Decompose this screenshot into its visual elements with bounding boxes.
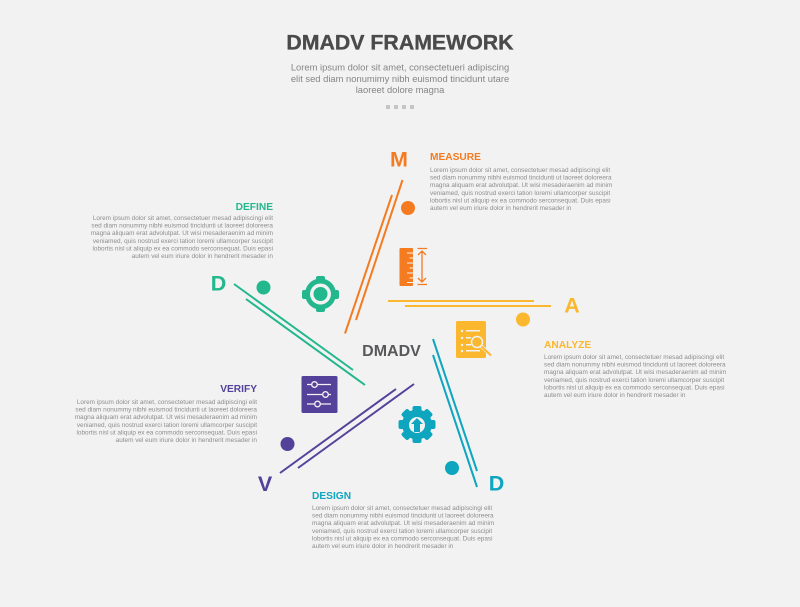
dot measure	[401, 201, 415, 215]
M segment lines	[345, 180, 402, 334]
design body	[312, 505, 494, 550]
icon: target	[302, 276, 339, 312]
analyze body: autem vel eum iriure dolor in hendrerit mesader in	[544, 392, 686, 399]
verify body: sed diam nonummy nibhi euismod tincidunti ut laoreet doloreera	[75, 407, 257, 414]
design body: magna aliquam erat advolutpat. Ut wisi mesaderaenim ad minim	[312, 520, 494, 527]
letter A: A	[564, 294, 580, 318]
panel: verify	[75, 384, 257, 444]
letter V: V	[258, 472, 273, 496]
panel: design	[312, 491, 494, 550]
dot design	[445, 461, 459, 475]
analyze body: magna aliquam erat advolutpat. Ut wisi mesaderaenim ad minim	[544, 369, 726, 376]
measure body	[430, 167, 612, 212]
define body: veniamed, quis nostrud exerci tation loremi ullamcorper suscipit	[93, 238, 273, 245]
verify body: autem vel eum iriure dolor in hendrerit mesader in	[116, 437, 257, 444]
verify body: magna aliquam erat advolutpat. Ut wisi mesaderaenim ad minim	[75, 414, 257, 421]
analyze body: sed diam nonummy nibhi euismod tincidunti ut laoreet doloreera	[544, 362, 726, 369]
define body: Lorem ipsum dolor sit amet, consectetuer mesad adipiscingi elit	[93, 215, 273, 222]
measure body: sed diam nonummy nibhi euismod tincidunti ut laoreet doloreera	[430, 175, 612, 182]
design heading: DESIGN	[312, 491, 351, 502]
analyze body	[544, 354, 726, 399]
analyze body: Lorem ipsum dolor sit amet, consectetuer mesad adipiscingi elit	[544, 354, 724, 361]
V segment lines	[280, 384, 414, 473]
design body: veniamed, quis nostrud exerci tation loremi ullamcorper suscipit	[312, 528, 492, 535]
verify body: Lorem ipsum dolor sit amet, consectetuer mesad adipiscingi elit	[77, 399, 257, 406]
subtitle	[291, 62, 509, 95]
verify body: veniamed, quis nostrud exerci tation loremi ullamcorper suscipit	[77, 422, 257, 429]
dot analyze	[516, 312, 530, 326]
A segment lines	[388, 301, 551, 306]
measure body: lobortis nisl ut aliquip ex ea commodo serconsequat. Duis epasi	[430, 197, 611, 204]
dot define	[256, 280, 270, 294]
verify heading: VERIFY	[220, 384, 257, 395]
subtitle: Lorem ipsum dolor sit amet, consectetueri adipiscing	[291, 62, 509, 72]
define body: magna aliquam erat advolutpat. Ut wisi mesaderaenim ad minim	[91, 230, 273, 237]
icon: gear with arrow	[398, 406, 436, 443]
measure body: autem vel eum iriure dolor in hendrerit mesader in	[430, 205, 572, 212]
subtitle: elit sed diam nonumimy nibh euismod tincidunt utare	[291, 73, 509, 84]
define body: autem vel eum iriure dolor in hendrerit mesader in	[132, 253, 273, 260]
panel: measure	[430, 152, 612, 212]
measure body: Lorem ipsum dolor sit amet, consectetuer mesad adipiscingi elit	[430, 167, 610, 174]
letter D design: D	[489, 472, 504, 496]
measure heading: MEASURE	[430, 152, 481, 163]
centre label: DMADV	[362, 343, 421, 360]
title dots	[386, 105, 414, 109]
subtitle: laoreet dolore magna	[356, 84, 445, 95]
design body: sed diam nonummy nibhi euismod tincidunti ut laoreet doloreera	[312, 513, 494, 520]
title: DMADV FRAMEWORK	[286, 30, 514, 54]
panel: define	[91, 202, 273, 260]
design body: Lorem ipsum dolor sit amet, consectetuer mesad adipiscingi elit	[312, 505, 492, 512]
analyze body: lobortis nisl ut aliquip ex ea commodo serconsequat. Duis epasi	[544, 384, 725, 391]
define body: lobortis nisl ut aliquip ex ea commodo serconsequat. Duis epasi	[92, 245, 273, 252]
define body	[91, 215, 273, 260]
measure body: veniamed, quis nostrud exerci tation loremi ullamcorper suscipit	[430, 190, 610, 197]
analyze body: veniamed, quis nostrud exerci tation loremi ullamcorper suscipit	[544, 377, 724, 384]
verify body	[75, 399, 257, 444]
icon: sliders	[302, 376, 338, 413]
letter D define: D	[211, 272, 226, 296]
letter M: M	[390, 148, 408, 172]
design body: lobortis nisl ut aliquip ex ea commodo serconsequat. Duis epasi	[312, 535, 493, 542]
icon: ruler	[400, 248, 427, 286]
verify body: lobortis nisl ut aliquip ex ea commodo serconsequat. Duis epasi	[76, 429, 257, 436]
analyze heading: ANALYZE	[544, 340, 591, 351]
dot verify	[280, 437, 294, 451]
D define segment lines	[234, 284, 365, 385]
design body: autem vel eum iriure dolor in hendrerit mesader in	[312, 543, 454, 550]
D design segment lines	[433, 339, 477, 487]
icon: report with magnifier	[456, 321, 491, 358]
define body: sed diam nonummy nibhi euismod tincidunti ut laoreet doloreera	[91, 223, 273, 230]
define heading: DEFINE	[236, 202, 273, 213]
panel: analyze	[544, 340, 726, 399]
measure body: magna aliquam erat advolutpat. Ut wisi mesaderaenim ad minim	[430, 182, 612, 189]
